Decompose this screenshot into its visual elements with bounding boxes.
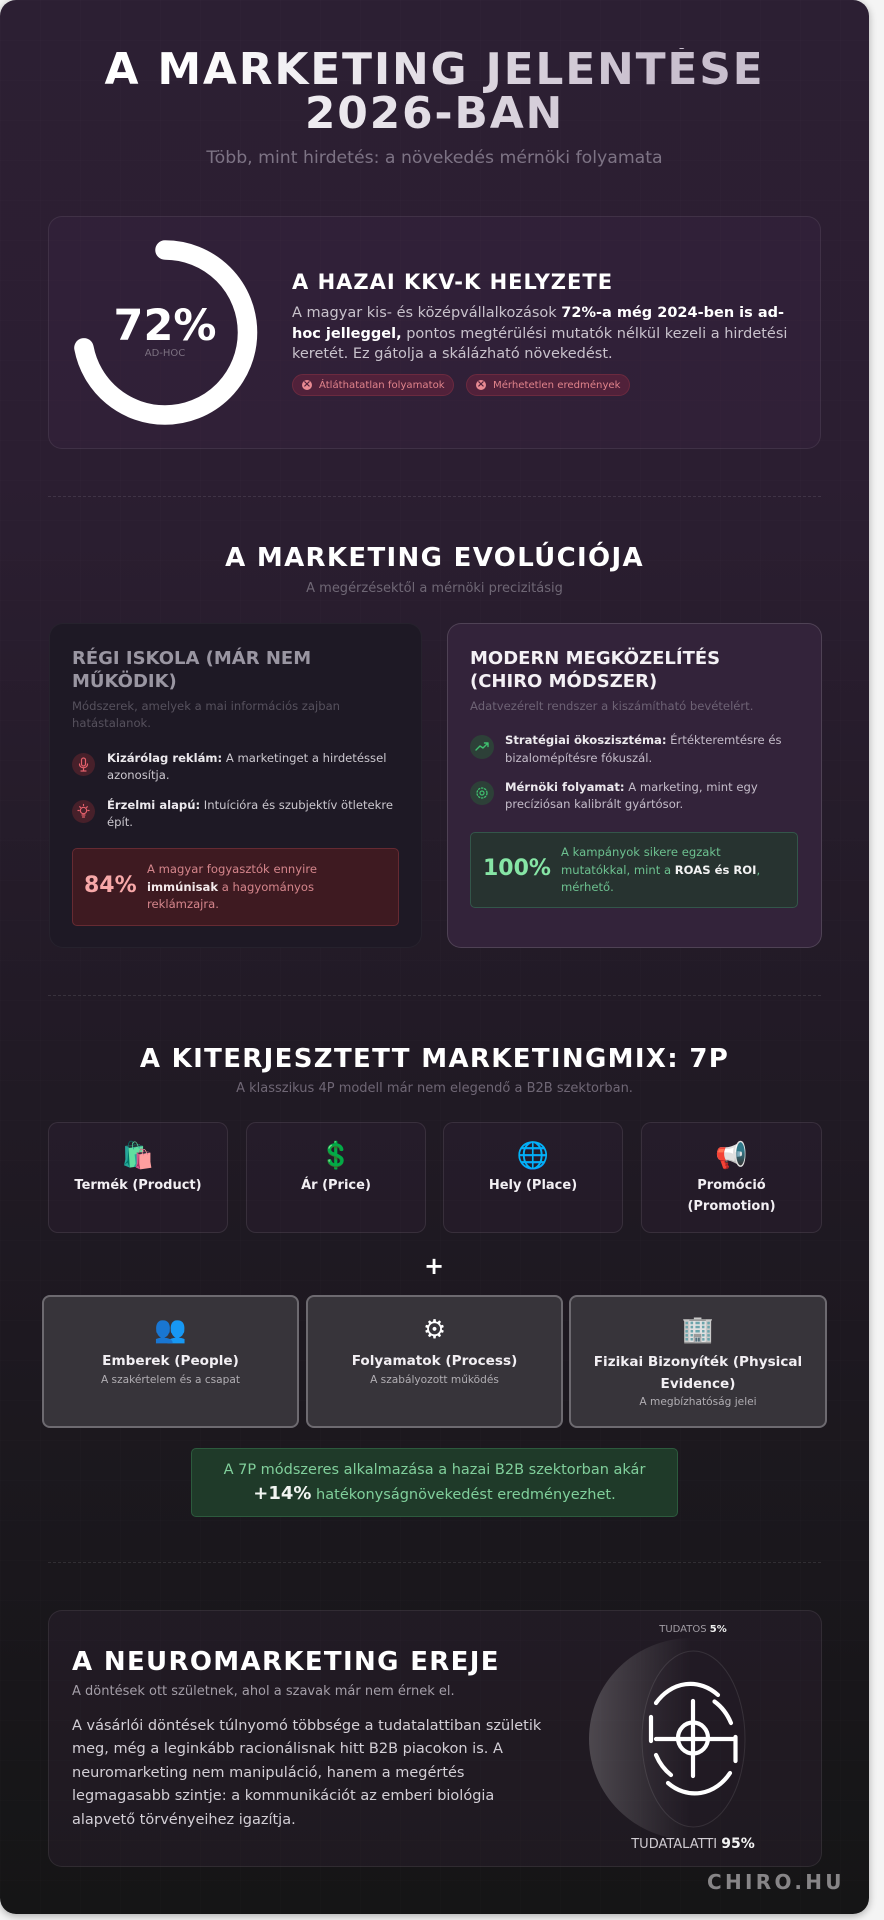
icon: trending up [470, 735, 494, 759]
callout value: 84%: 84% [84, 873, 137, 898]
chart: tudatos vs tudatalatti [589, 1640, 746, 1838]
heading: modern: (CHIRO MÓDSZER) [470, 671, 657, 692]
card: fizikai bizonyíték: Evidence) [661, 1376, 735, 1392]
label: tudatalatti: TUDATALATTI 95% [631, 1836, 755, 1852]
card: ár [246, 1122, 426, 1233]
text: hazai KKV: keretét. Ez gátolja a skálázható növekedést. [292, 346, 613, 362]
card: emberek: Emberek (People) [102, 1353, 239, 1369]
text: mérnöki folyamat: precíziósan kalibrált gyártósor. [505, 797, 683, 811]
text: stratégiai ökoszisztéma: Stratégiai ökoszisztéma: Értékteremtésre és [505, 733, 782, 747]
text: neuro alcím: A döntések ott születnek, ahol a szavak már nem érnek el. [72, 1684, 455, 1699]
tag: átláthatatlan: Átláthatatlan folyamatok [319, 380, 445, 391]
text: neuro törzs: neuromarketing nem manipuláció, hanem a megértés [72, 1764, 464, 1780]
card: fizikai bizonyíték: Fizikai Bizonyíték (Physical [594, 1354, 802, 1370]
subtitle: Több, mint hirdetés: a növekedés mérnöki folyamata [206, 148, 663, 168]
panel: neuromarketing [48, 1610, 822, 1867]
text: kizárólag reklám [107, 750, 386, 782]
sphere [589, 1638, 793, 1840]
text: régi iskola leírás: Módszerek, amelyek a mai információs zajban [72, 698, 340, 712]
card: promóció: (Promotion) [687, 1199, 776, 1214]
text: érzelmi alapú [107, 798, 393, 829]
card: ár: Ár (Price) [301, 1178, 371, 1193]
card: folyamatok: A szabályozott működés [370, 1374, 499, 1386]
section heading: evolúció: A MARKETING EVOLÚCIÓJA [225, 543, 644, 573]
text: neuro törzs: legmagasabb szintje: a kommunikációt az emberi biológia [72, 1788, 494, 1804]
text: mérnöki folyamat [505, 780, 758, 811]
inner ellipse [642, 1651, 745, 1827]
card: ár: 💲 [320, 1141, 352, 1171]
card: fizikai bizonyíték: A megbízhatóság jelei [639, 1396, 757, 1408]
heading: neuromarketing: A NEUROMARKETING EREJE [72, 1647, 500, 1677]
card: hely [443, 1122, 623, 1233]
card: emberek: 👥 [154, 1315, 187, 1345]
text: mérnöki folyamat: Mérnöki folyamat: A marketing, mint egy [505, 780, 758, 794]
ring label: AD-HOC [145, 348, 185, 359]
title [0, 48, 869, 136]
card: hely: 🌐 [517, 1141, 549, 1171]
callout: +14% [191, 1448, 678, 1517]
text: stratégiai ökoszisztéma [505, 733, 782, 764]
text: érzelmi alapú: épít. [107, 815, 133, 829]
callout text: 84%: A magyar fogyasztók ennyire [147, 862, 317, 876]
panel: modern megközelítés [447, 623, 822, 948]
text: kizárólag reklám: azonosítja. [107, 768, 170, 782]
card: folyamatok: Folyamatok (Process) [352, 1353, 517, 1369]
text: régi iskola leírás [72, 698, 340, 730]
callout text: 100%: mérhető. [561, 880, 614, 894]
text: modern leírás: Adatvezérelt rendszer a kiszámítható bevételért. [470, 698, 753, 712]
card: folyamatok: ⚙ [423, 1315, 446, 1345]
title: A MARKETING JELENTÉSE [104, 44, 764, 95]
callout: +14%: +14% hatékonyságnövekedést eredményezhet. [253, 1483, 616, 1504]
card: termék [48, 1122, 228, 1233]
tag: mérhetetlen [466, 374, 630, 396]
callout text: 84% [147, 862, 317, 911]
card: emberek: A szakértelem és a csapat [101, 1374, 240, 1386]
tag: mérhetetlen: Mérhetetlen eredmények [493, 380, 620, 391]
text: neuro törzs [72, 1718, 542, 1828]
card: termék: 🛍️ [122, 1141, 154, 1171]
icon: crosshair [651, 1684, 736, 1793]
heading: régi iskola: MŰKÖDIK) [72, 671, 177, 692]
text: neuro törzs: alapvető törvényeihez igazítja. [72, 1812, 296, 1828]
brand: chiro.hu: CHIRO.HU [707, 1870, 845, 1894]
card: termék: Termék (Product) [74, 1178, 202, 1193]
callout text: 84%: reklámzajra. [147, 897, 219, 911]
text: neuro törzs: meg, még a leginkább racionálisnak hitt B2B piacokon is. A [72, 1741, 503, 1757]
text: hazai KKV: A magyar kis- és középvállalkozások 72%-a még 2024-ben is ad- [292, 305, 784, 321]
heading: régi iskola [72, 648, 311, 692]
icon: gear [470, 781, 494, 805]
text: kizárólag reklám: Kizárólag reklám: A marketinget a hirdetéssel [107, 750, 386, 764]
text: stratégiai ökoszisztéma: bizalomépítésre fókuszál. [505, 750, 652, 764]
heading: modern: MODERN MEGKÖZELÍTÉS [470, 648, 720, 669]
ring value: 72% [114, 301, 216, 351]
card: fizikai bizonyíték [569, 1295, 827, 1428]
card: promóció [641, 1122, 822, 1233]
icon: microphone [72, 753, 95, 776]
label: tudatos: TUDATOS 5% [659, 1624, 727, 1635]
icon: light bulb [72, 800, 95, 823]
text: régi iskola leírás: hatástalanok. [72, 716, 151, 730]
callout: +14%: A 7P módszeres alkalmazása a hazai B2B szektorban akár [224, 1462, 645, 1478]
card: promóció: 📢 [715, 1141, 748, 1171]
heading: modern [470, 648, 720, 692]
section subtitle: 7P: A klasszikus 4P modell már nem elegendő a B2B szektorban. [236, 1081, 633, 1096]
tag: átláthatatlan [292, 374, 454, 396]
card: fizikai bizonyíték: 🏢 [682, 1315, 714, 1345]
heading: régi iskola: RÉGI ISKOLA (MÁR NEM [72, 648, 311, 669]
section heading: 7P: A KITERJESZTETT MARKETINGMIX: 7P [140, 1044, 729, 1074]
text: neuro törzs: A vásárlói döntések túlnyomó többsége a tudatalattiban születik [72, 1718, 541, 1734]
title: 2026-BAN [305, 88, 564, 139]
callout value: 100%: 100% [483, 856, 551, 881]
plus sign: + [424, 1252, 444, 1280]
panel: hazai KKV helyzete [48, 216, 821, 449]
text: hazai KKV [292, 305, 787, 362]
callout: 84% [72, 848, 399, 926]
callout: 100% [470, 832, 798, 908]
text: hazai KKV: hoc jelleggel, pontos megtérülési mutatók nélkül kezeli a hirdetési [292, 326, 787, 342]
callout text: 100% [561, 845, 760, 894]
card: promóció: Promóció [697, 1178, 766, 1193]
text: érzelmi alapú: Érzelmi alapú: Intuícióra és szubjektív ötletekre [107, 798, 393, 812]
panel: régi iskola [49, 623, 422, 948]
chart: 72% ring [74, 240, 258, 425]
callout text: 84%: immúnisak a hagyományos [147, 880, 314, 894]
card: folyamatok [306, 1295, 563, 1428]
card: emberek [42, 1295, 299, 1428]
heading: hazai KKV: A HAZAI KKV-K HELYZETE [292, 270, 613, 294]
section subtitle: evolúció: A megérzésektől a mérnöki precizitásig [306, 581, 563, 596]
card: hely: Hely (Place) [489, 1178, 577, 1193]
callout text: 100%: A kampányok sikere egzakt [561, 845, 721, 859]
callout text: 100%: mutatókkal, mint a ROAS és ROI, [561, 862, 760, 876]
